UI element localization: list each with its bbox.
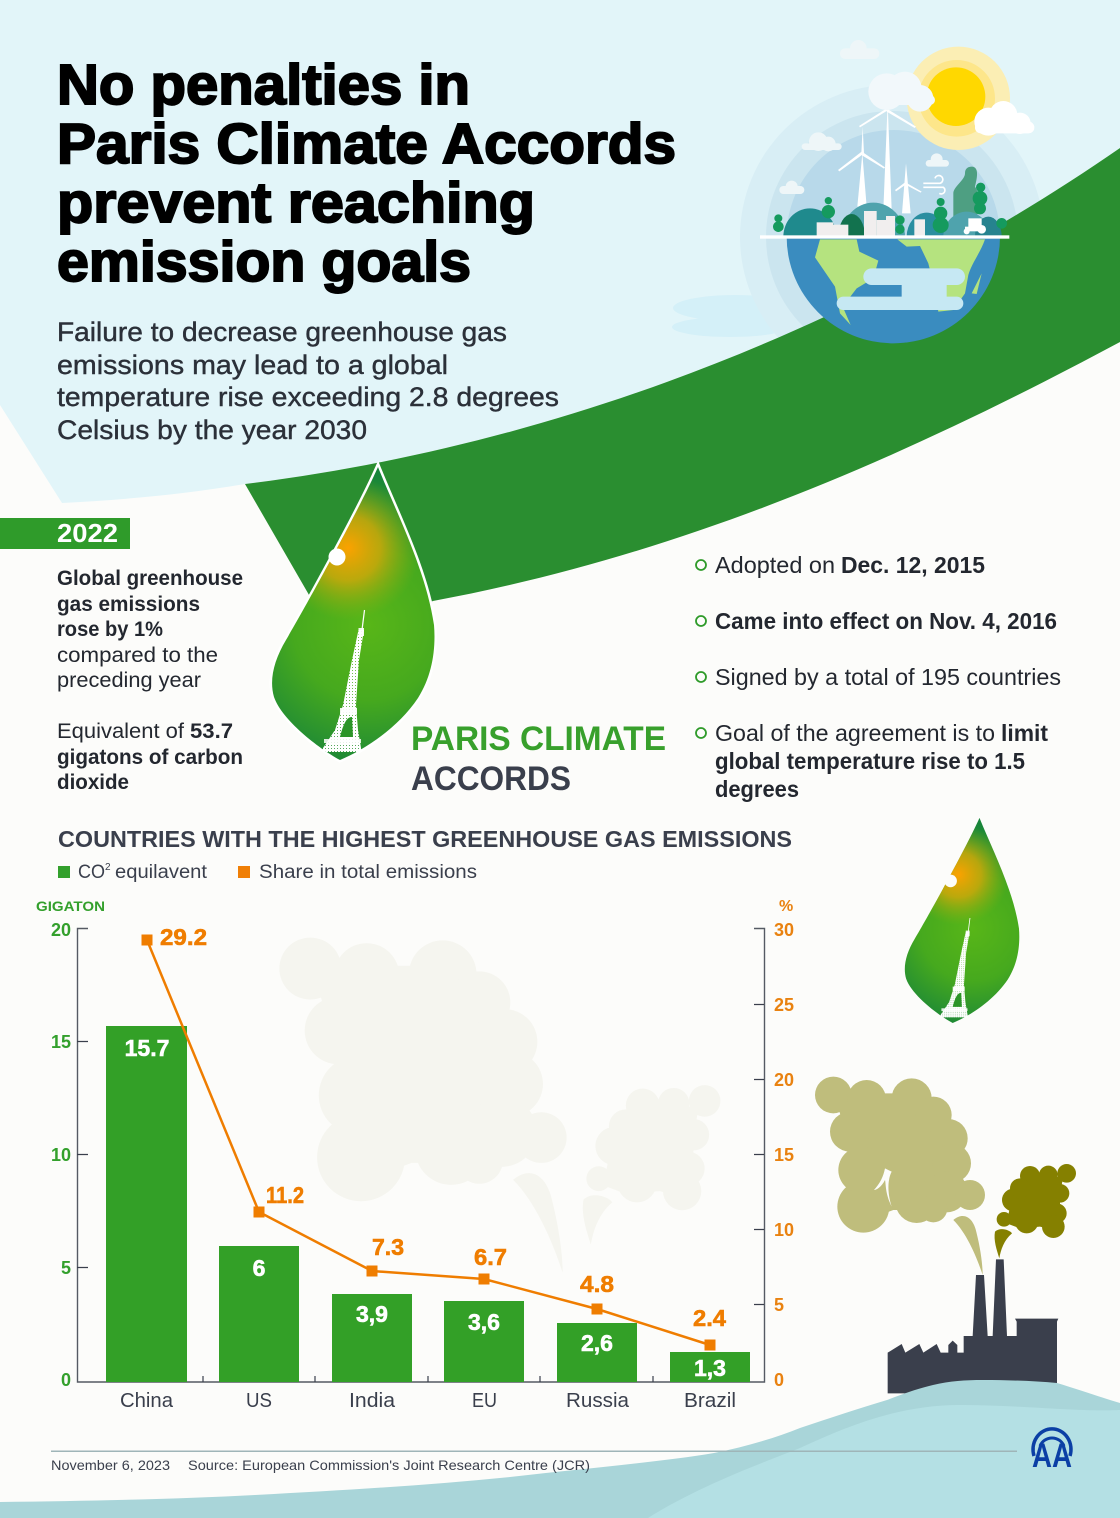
- chart legend: [58, 862, 477, 883]
- illustration: globe with renewable energy: [760, 40, 1034, 343]
- clouds: [868, 72, 935, 112]
- equivalent text: [57, 719, 243, 794]
- continents: [815, 239, 985, 325]
- bar values: 15.7: [125, 1035, 169, 1061]
- light blue header shape: [0, 0, 1120, 503]
- title: prevent reaching: [57, 171, 535, 235]
- subtitle: Celsius by the year 2030: [57, 415, 367, 445]
- buildings and solar panels: [817, 211, 925, 236]
- light smoke: [815, 1077, 985, 1275]
- footer: date and source: November 6, 2023: [51, 1457, 170, 1473]
- left axis: 5: [61, 1258, 71, 1278]
- bar chart: emissions by country: [36, 898, 794, 1412]
- heading: Paris Climate Accords: [411, 720, 666, 798]
- equivalent text: Equivalent of: [57, 719, 184, 743]
- country labels: China: [120, 1390, 174, 1412]
- fact: goal: global temperature rise to 1.5: [715, 748, 1025, 774]
- wind turbines: [838, 73, 922, 213]
- emissions rise text: compared to the: [57, 643, 218, 667]
- subtitle: Failure to decrease greenhouse gas: [57, 317, 507, 347]
- share values: 7.3: [372, 1234, 404, 1260]
- hill: light layer: [648, 1405, 1120, 1518]
- factory silhouette: [888, 1259, 1058, 1407]
- title: Paris Climate Accords: [57, 112, 676, 176]
- right axis: 15: [774, 1145, 794, 1165]
- title: [57, 53, 676, 294]
- sky hemisphere: [787, 130, 1000, 237]
- year tag: [0, 518, 130, 549]
- left axis: 10: [51, 1145, 71, 1165]
- bar values: 2,6: [581, 1330, 613, 1356]
- panel: agreement facts: [696, 552, 1061, 802]
- bar values: [125, 1035, 726, 1381]
- equivalent text: 53.7: [190, 719, 233, 743]
- footer: date and source: Source: European Commission's Joint Research Centre (JCR): [188, 1457, 590, 1473]
- smoke crack: [874, 1168, 892, 1207]
- emissions rise text: Global greenhouse: [57, 566, 243, 590]
- ground line: [760, 235, 1009, 239]
- tall shrub: [953, 167, 979, 223]
- logo: Anadolu Agency: [1032, 1429, 1072, 1475]
- chart legend: equilavent: [115, 862, 208, 883]
- panel: 2022 facts: [0, 518, 243, 794]
- cloud bands over globe: [837, 268, 965, 310]
- emissions rise text: gas emissions: [57, 592, 200, 616]
- equivalent text: dioxide: [57, 770, 129, 794]
- logo: Anadolu Agency: AA: [1032, 1437, 1072, 1475]
- small leaf icon: [905, 818, 1019, 1023]
- right axis: 25: [774, 995, 794, 1015]
- right axis: 20: [774, 1070, 794, 1090]
- ocean hemisphere: [787, 237, 1000, 343]
- hill: dark layer: [0, 1380, 1120, 1518]
- emissions rise text: [57, 566, 243, 692]
- emissions rise text: preceding year: [57, 668, 201, 692]
- right axis: %: [779, 898, 793, 915]
- fact: effect date: Came into effect on Nov. 4, 2016: [715, 608, 1057, 634]
- bar values: 1,3: [694, 1355, 726, 1381]
- title: No penalties in: [57, 53, 470, 117]
- fact: goal: limit: [1001, 720, 1048, 746]
- share values: 6.7: [474, 1244, 507, 1270]
- trees: [773, 183, 1007, 234]
- dark smoke: [995, 1164, 1076, 1258]
- icon: Paris Climate Accords leaf with Eiffel Tower: [272, 467, 434, 760]
- fact: goal: degrees: [715, 776, 799, 802]
- bar values: 3,6: [468, 1309, 500, 1335]
- faint background smoke: [279, 938, 720, 1273]
- country labels: US: [246, 1390, 272, 1412]
- left axis: 20: [51, 920, 71, 940]
- title: emission goals: [57, 230, 471, 294]
- bar values: 3,9: [356, 1301, 388, 1327]
- green swoosh: [245, 148, 1120, 640]
- share values: 29.2: [160, 924, 207, 950]
- right axis: 0: [774, 1370, 784, 1390]
- subtitle: temperature rise exceeding 2.8 degrees: [57, 382, 559, 412]
- right axis: [774, 898, 794, 1390]
- year tag: 2022: [57, 518, 118, 548]
- share line: [142, 934, 716, 1350]
- emissions rise text: rose by 1%: [57, 617, 163, 641]
- left axis: GIGATON: [36, 898, 105, 914]
- illustration: halo around globe: [740, 85, 1044, 389]
- left axis: 15: [51, 1032, 71, 1052]
- wind symbol: [923, 176, 945, 194]
- country labels: India: [349, 1390, 396, 1412]
- right axis: 5: [774, 1295, 784, 1315]
- bar values: 6: [253, 1255, 265, 1281]
- fact: adoption date: Adopted on: [715, 552, 835, 578]
- share values: 2.4: [693, 1305, 726, 1331]
- left axis: [36, 898, 764, 1390]
- share values: 4.8: [580, 1271, 614, 1297]
- share values: 11.2: [266, 1182, 304, 1208]
- subtitle: emissions may lead to a global: [57, 350, 448, 380]
- chart legend: Share in total emissions: [259, 862, 477, 883]
- fact: signatories: Signed by a total of 195 countries: [715, 664, 1061, 690]
- fact: adoption date: [696, 552, 985, 578]
- fact: adoption date: Dec. 12, 2015: [841, 552, 985, 578]
- country labels: [120, 1390, 736, 1412]
- sun: [907, 47, 1010, 150]
- chart legend: 2: [105, 862, 111, 873]
- country labels: Brazil: [684, 1390, 736, 1412]
- fact: goal: [696, 720, 1048, 802]
- heading: Paris Climate Accords: ACCORDS: [411, 760, 571, 798]
- subtitle: [57, 317, 559, 445]
- chart heading: COUNTRIES WITH THE HIGHEST GREENHOUSE GAS EMISSIONS: [58, 826, 792, 852]
- hills: [783, 202, 1002, 236]
- share values: [160, 924, 726, 1331]
- bars: [106, 1026, 750, 1382]
- icon: factory with smoke: [815, 1077, 1076, 1407]
- left axis: 0: [61, 1370, 71, 1390]
- heading: Paris Climate Accords: PARIS CLIMATE: [411, 720, 666, 758]
- footer rule: [51, 1450, 1017, 1452]
- right axis: 30: [774, 920, 794, 940]
- fact: goal: Goal of the agreement is to: [715, 720, 995, 746]
- tractor: [964, 218, 986, 234]
- right axis: 10: [774, 1220, 794, 1240]
- country labels: Russia: [566, 1390, 630, 1412]
- equivalent text: gigatons of carbon: [57, 745, 243, 769]
- chart legend: CO: [78, 862, 105, 883]
- country labels: EU: [472, 1390, 497, 1412]
- illustration: faint clouds lower left: [672, 295, 797, 337]
